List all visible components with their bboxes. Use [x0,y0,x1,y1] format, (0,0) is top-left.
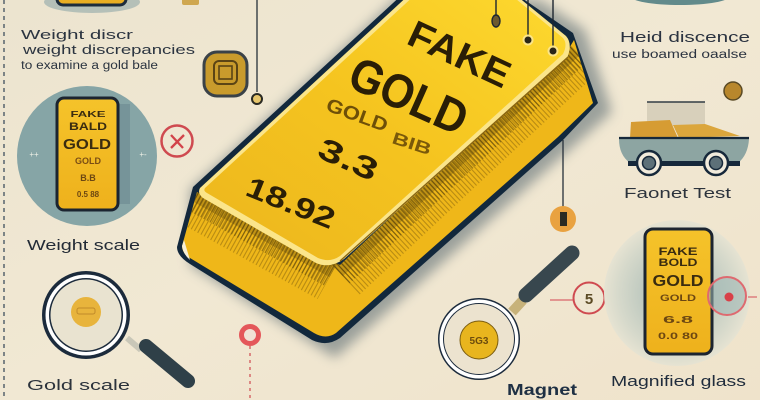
panel: large fake gold bar [177,0,612,358]
panel: small fake gold bar on teal circle: BALD [69,121,107,133]
icon: gold stamp badge [204,52,247,96]
top-left partial gold bar [44,0,199,13]
text: engraved bar lettering [241,13,517,236]
label: magnified glass: Magnified glass [611,373,746,390]
icon: heart coin [724,82,742,100]
icon: red numbered circle [550,282,632,314]
pointer line with node [252,0,262,104]
text: engraved bar lettering: GOLD [341,47,476,146]
text: engraved bar lettering: 18.92 [241,171,339,236]
panel: magnified gold bar: BOLD [658,257,698,269]
bar side hatching [190,50,575,271]
pointer with orange node [550,140,576,232]
panel: small fake gold bar on teal circle: ++ [29,150,39,159]
label: gold scale: Gold scale [27,378,130,394]
label: faonet test: Faonet Test [624,185,732,202]
label: magnet: Magnet [507,382,578,399]
icon: red inspection circle [708,277,757,315]
icon: magnifying glass with coin [42,271,188,381]
text block: heid discrepance: use boamed oaalse [612,49,747,61]
text: engraved bar lettering: GOLD [323,95,391,137]
panel: magnified gold bar [604,220,750,366]
text block: weight discrepancies: weight discrepancies [22,42,196,57]
text block: heid discrepance [612,30,750,61]
icon: magnifier with coin [438,253,572,380]
panel: small fake gold bar on teal circle: FAKE [70,109,106,119]
bar pointer pins [492,0,558,56]
text block: weight discrepancies: to examine a gold bale [21,60,158,72]
panel: magnified gold bar: FAKE [658,246,698,258]
panel: small fake gold bar on teal circle: B.B [80,173,96,183]
text: engraved bar lettering: 3.3 [313,131,384,188]
text block: heid discrepance: Heid discence [620,30,750,46]
text: engraved bar lettering: BIB [390,129,434,159]
icon: red dot with dashed line [242,326,258,400]
panel: magnified gold bar: 6.8 [663,315,694,326]
panel: small fake gold bar on teal circle: +- [139,150,147,159]
text block: weight discrepancies [21,27,196,72]
icon: red numbered circle: 5 [585,291,593,308]
panel: small fake gold bar on teal circle: GOLD [75,156,101,166]
panel: magnified gold bar: GOLD [660,293,697,303]
text block: weight discrepancies: Weight discr [21,27,134,42]
panel: small fake gold bar on teal circle [17,86,157,226]
panel: magnified gold bar: GOLD [652,273,704,290]
top-right teal shadow [630,0,730,5]
text: engraved bar lettering: FAKE [401,13,517,97]
icon: car carrying gold [619,102,749,175]
icon: magnifier with coin: 5G3 [470,336,489,347]
icon: red X circle [162,126,192,156]
panel: small fake gold bar on teal circle: GOLD [63,137,111,153]
panel: small fake gold bar on teal circle: 0.5 88 [77,190,100,199]
panel: magnified gold bar: 0.0 80 [658,331,698,341]
label: weight scale: Weight scale [27,238,140,254]
